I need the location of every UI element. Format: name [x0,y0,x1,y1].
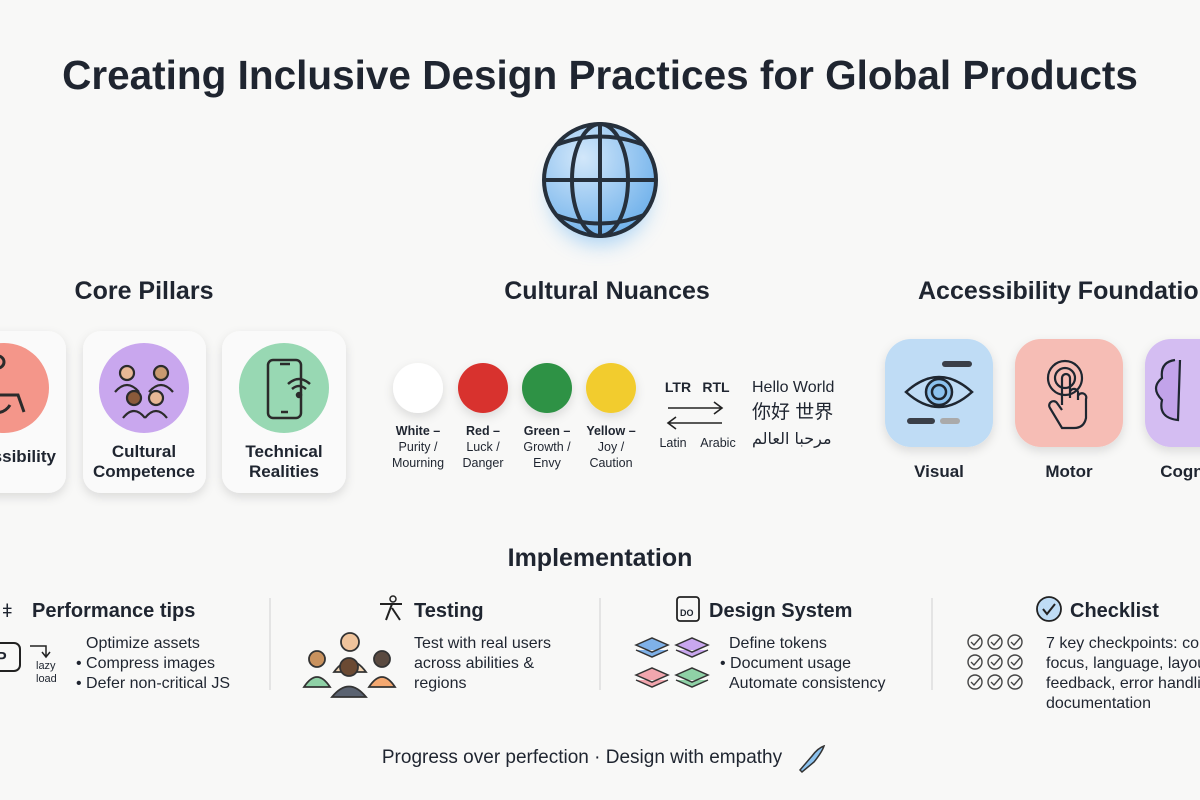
panel: color meanings: Joy / [598,440,625,454]
panel: performance tips: • Defer non-critical JS [76,675,230,692]
card: technical realities: Technical [245,442,323,461]
panel: testing [304,596,551,697]
card: technical realities: Realities [249,462,319,481]
panel: color meanings: Danger [462,456,504,470]
tile: motor: Motor [1045,462,1093,481]
heading: Implementation: Implementation [508,544,692,572]
panel: color meanings: Envy [533,456,562,470]
panel: text direction: LTR [665,379,691,395]
panel: performance tips [0,600,230,692]
panel: testing: regions [414,675,466,692]
panel: color meanings: Purity / [399,440,438,454]
card: cultural competence [83,331,206,493]
icon: globe [544,124,656,245]
panel: checklist: documentation [1046,695,1151,712]
panel: text direction: مرحبا العالم [752,429,832,449]
panel: design system: Define tokens [729,635,827,652]
panel: color meanings: Yellow – [586,424,636,438]
panel: design system: Design System [709,600,852,622]
panel: text direction: 你好 世界 [752,401,833,423]
panel: color meanings: Growth / [523,440,571,454]
panel: color meanings: Red – [466,424,500,438]
panel: performance tips: ǂ [2,601,13,621]
panel: design system: Automate consistency [729,675,886,692]
panel: color meanings: Green – [524,424,570,438]
panel: core pillars cards [0,331,346,493]
panel: performance tips: Performance tips [32,600,195,622]
card: cultural competence: Competence [93,462,195,481]
panel: text direction: RTL [702,379,730,395]
panel: accessibility tiles [885,339,1200,481]
panel: checklist [968,597,1200,712]
panel: performance tips: lazy [36,660,56,672]
heading: Core Pillars: Core Pillars [75,277,213,305]
panel: design system: DO [680,608,694,618]
panel: text direction [659,379,834,450]
panel: color meanings: White – [396,424,440,438]
panel: color meanings [392,363,636,470]
tile: visual [885,339,993,481]
footer tagline: Progress over perfection · Design with empathy [382,747,783,768]
card: accessibility [0,331,66,493]
panel: checklist: Checklist [1070,600,1159,622]
title: Creating Inclusive Design Practices for Global Products [62,52,1138,98]
panel: text direction: Latin [659,436,687,450]
panel: testing: Test with real users [414,635,551,652]
panel: color meanings: Caution [589,456,633,470]
tile: motor [1015,339,1123,481]
panel: testing: across abilities & [414,655,534,672]
tile: cognitive [1145,339,1200,481]
card: technical realities [222,331,346,493]
panel: testing: Testing [414,600,484,622]
heading: Cultural Nuances: Cultural Nuances [504,277,710,305]
card: cultural competence: Cultural [112,442,176,461]
tile: visual: Visual [914,462,964,481]
panel: color meanings: Luck / [466,440,500,454]
panel: design system: • Document usage [720,655,851,672]
panel: performance tips: Optimize assets [86,635,200,652]
panel: text direction: Arabic [700,436,736,450]
panel: performance tips: load [36,673,57,685]
panel: performance tips: • Compress images [76,655,215,672]
panel: text direction: Hello World [752,379,834,396]
panel: design system [636,597,886,692]
panel: color meanings: Mourning [392,456,444,470]
